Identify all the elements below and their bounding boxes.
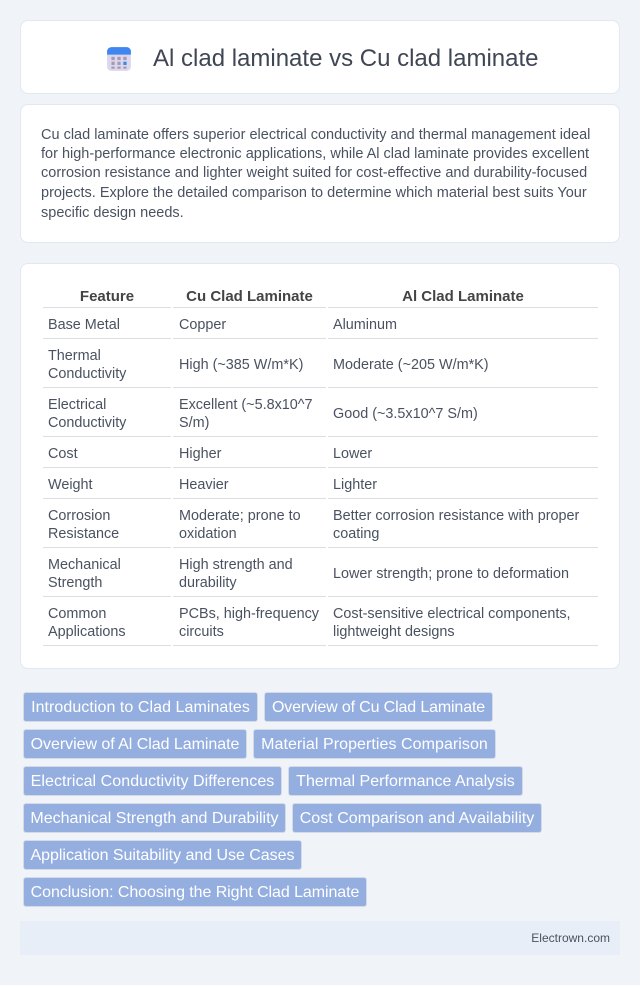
footer text: Electrown.com <box>531 931 610 945</box>
tag: Material Properties Comparison <box>261 736 488 753</box>
tag <box>23 840 302 870</box>
row: mechanical strength: Mechanical <box>48 557 121 573</box>
row: electrical conductivity: Good (~3.5x10^7 S/m) <box>333 406 478 422</box>
intro text <box>41 127 590 221</box>
row: corrosion resistance: oxidation <box>179 526 237 542</box>
table header: Feature <box>80 288 134 305</box>
row: weight <box>48 477 377 493</box>
intro card <box>20 104 620 243</box>
intro text: for high-performance electronic applications, while Al clad laminate provides excellent <box>41 146 589 162</box>
table header <box>80 288 524 305</box>
row: weight: Heavier <box>179 477 229 493</box>
tag <box>23 692 258 722</box>
row: base metal <box>48 317 397 333</box>
row: common applications: circuits <box>179 624 224 640</box>
icon: calendar <box>107 47 131 71</box>
row: cost: Higher <box>179 446 221 462</box>
tag: Application Suitability and Use Cases <box>31 847 294 864</box>
intro text: projects. Explore the detailed comparison to determine which material best suits Your <box>41 185 587 201</box>
row: electrical conductivity: S/m) <box>179 415 209 431</box>
row: thermal conductivity: High (~385 W/m*K) <box>179 357 303 373</box>
row: corrosion resistance: Corrosion <box>48 508 110 524</box>
row: weight: Weight <box>48 477 93 493</box>
row: common applications <box>48 606 571 640</box>
tag <box>23 877 367 907</box>
row: cost: Lower <box>333 446 372 462</box>
row: mechanical strength: High strength and <box>179 557 293 573</box>
tag <box>292 803 542 833</box>
row: thermal conductivity: Thermal <box>48 348 101 364</box>
row: mechanical strength: Strength <box>48 575 102 591</box>
tag: Electrical Conductivity Differences <box>31 773 274 790</box>
row: corrosion resistance: Better corrosion resistance with proper <box>333 508 579 524</box>
row: thermal conductivity: Moderate (~205 W/m*K) <box>333 357 489 373</box>
intro text: specific design needs. <box>41 205 184 221</box>
tag <box>288 766 523 796</box>
tag: Introduction to Clad Laminates <box>31 699 250 716</box>
tag <box>23 766 282 796</box>
row: base metal: Aluminum <box>333 317 397 333</box>
row: cost: Cost <box>48 446 78 462</box>
row: thermal conductivity <box>48 348 489 382</box>
tag <box>23 729 247 759</box>
row: mechanical strength: durability <box>179 575 237 591</box>
row: mechanical strength <box>48 557 569 591</box>
row: mechanical strength: Lower strength; prone to deformation <box>333 566 569 582</box>
tag: Mechanical Strength and Durability <box>30 810 279 827</box>
tag: Cost Comparison and Availability <box>300 810 534 827</box>
row: common applications: Applications <box>48 624 126 640</box>
row: weight: Lighter <box>333 477 377 493</box>
row: corrosion resistance: Moderate; prone to <box>179 508 301 524</box>
table header: Cu Clad Laminate <box>186 288 313 305</box>
footer <box>20 921 620 955</box>
table card <box>20 263 620 669</box>
header card <box>20 20 620 94</box>
row: electrical conductivity: Excellent (~5.8x10^7 <box>179 397 313 413</box>
tag: Overview of Cu Clad Laminate <box>272 699 485 716</box>
title: Al clad laminate vs Cu clad laminate <box>153 45 539 72</box>
row: base metal: Base Metal <box>48 317 120 333</box>
tag: Thermal Performance Analysis <box>296 773 515 790</box>
intro text: corrosion resistance and lighter weight suited for cost-effective and durability-focused <box>41 165 587 181</box>
tag list <box>23 692 542 907</box>
row: common applications: Common <box>48 606 106 622</box>
row: thermal conductivity: Conductivity <box>48 366 126 382</box>
row: base metal: Copper <box>179 317 226 333</box>
intro text: Cu clad laminate offers superior electrical conductivity and thermal management ideal <box>41 127 590 143</box>
row: electrical conductivity <box>48 397 478 431</box>
row: common applications: Cost-sensitive electrical components, <box>333 606 571 622</box>
row: cost <box>48 446 372 462</box>
row: corrosion resistance: Resistance <box>48 526 119 542</box>
table header: Al Clad Laminate <box>402 288 524 305</box>
tag: Overview of Al Clad Laminate <box>31 736 239 753</box>
tag <box>253 729 496 759</box>
tag: Conclusion: Choosing the Right Clad Laminate <box>31 884 359 901</box>
row: corrosion resistance: coating <box>333 526 379 542</box>
comparison table <box>43 288 598 646</box>
tag <box>23 803 286 833</box>
row: corrosion resistance <box>48 508 580 542</box>
row: electrical conductivity: Conductivity <box>48 415 126 431</box>
row: common applications: PCBs, high-frequency <box>179 606 319 622</box>
row: electrical conductivity: Electrical <box>48 397 106 413</box>
row: common applications: lightweight designs <box>333 624 455 640</box>
tag <box>264 692 493 722</box>
